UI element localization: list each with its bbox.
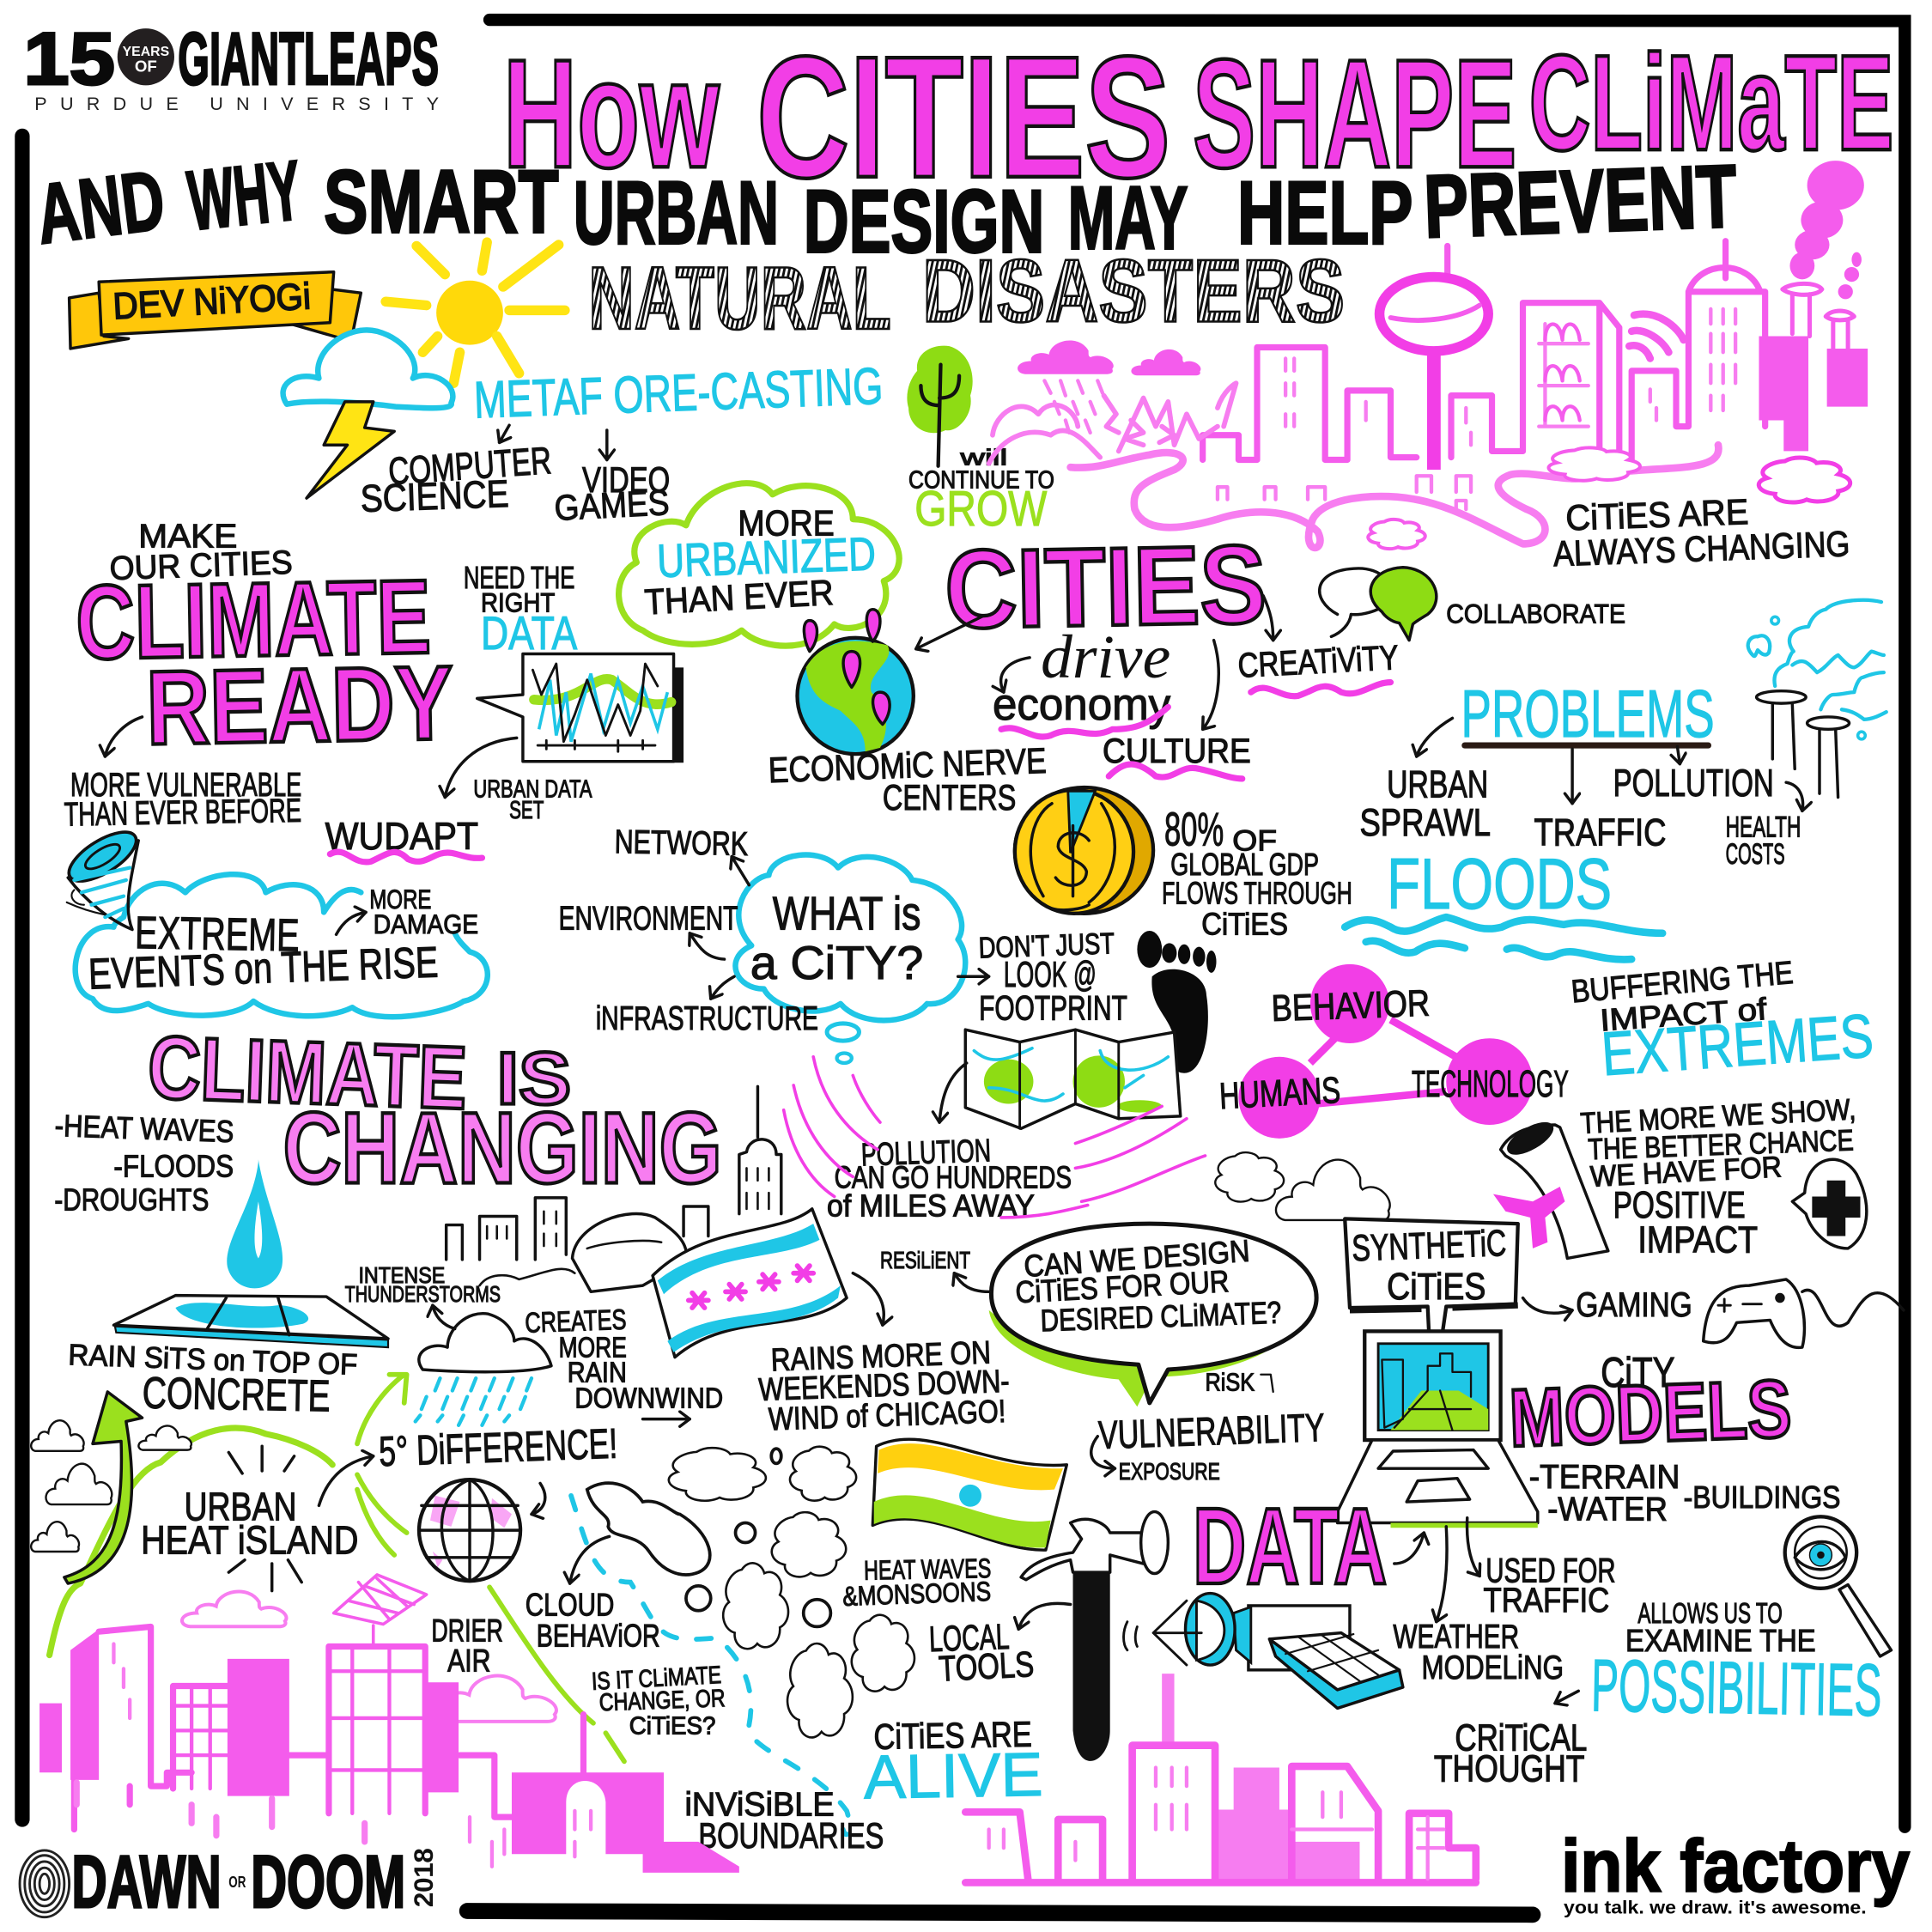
section: problems: COSTS — [1726, 838, 1785, 871]
text: heat waves and monsoons: &MONSOONS — [842, 1576, 992, 1612]
text: 5 degree difference: 5° DiFFERENCE! — [378, 1421, 618, 1475]
subtitle: SMART — [324, 152, 559, 252]
text: drier air — [431, 1613, 503, 1678]
text: critical thought: THOUGHT — [1434, 1748, 1584, 1789]
icon: tornado — [62, 823, 143, 930]
logo: dawn or doom: DOOM — [251, 1841, 405, 1923]
subtitle: URBAN — [574, 163, 779, 263]
text: urban data set with arrow — [445, 738, 592, 824]
text: cities are always changing — [1552, 491, 1850, 574]
illustration: bottom left skyline — [39, 1575, 739, 1873]
list: terrain, water, buildings — [1529, 1459, 1840, 1528]
text: rain sits on top of concrete: RAIN SiTS on TOP OF — [68, 1339, 358, 1382]
callout: extreme events: EXTREME — [135, 908, 300, 961]
logo: 150 years of giant leaps: PURDUE UNIVERSITY — [34, 93, 439, 114]
illustration: top right skyline — [989, 161, 1868, 549]
icon: globe with pins — [798, 610, 914, 754]
logo: 150 years of giant leaps: OF — [135, 57, 157, 75]
text: rains more on weekends: RAINS MORE ON — [770, 1334, 992, 1377]
logo: dawn or doom: DAWN — [71, 1841, 222, 1923]
text: is it climate change or cities: CHANGE, OR — [598, 1685, 726, 1716]
icon: wire globe — [419, 1479, 545, 1581]
icon: sun — [386, 242, 565, 383]
heading: climate is changing: IS — [497, 1038, 571, 1121]
icon: magnifying glass with eye — [1785, 1516, 1891, 1656]
text: computer science and video games — [360, 425, 671, 528]
banner: Dev Niyogi: DEV NiYOGi — [112, 276, 312, 327]
section: floods — [1345, 843, 1662, 959]
text: 80% of global gdp: CiTiES — [1201, 906, 1288, 941]
logo: dawn or doom: 2018 — [408, 1848, 439, 1907]
text: don't just look at footprint: DON'T JUST — [978, 927, 1115, 965]
text and icon: gaming controller — [1523, 1279, 1904, 1347]
callout: extreme events — [76, 874, 488, 1017]
icon: hammer — [1021, 1512, 1168, 1761]
subtitle — [32, 143, 1739, 271]
text: urban heat island: URBAN — [184, 1485, 296, 1529]
heading: data: DATA — [1193, 1485, 1387, 1607]
text: creativity: CREATiViTY — [1237, 638, 1400, 685]
icon: green upward arrow — [50, 1392, 332, 1656]
text: heat waves and monsoons — [842, 1552, 992, 1612]
callout: what is a city: WHAT is — [773, 887, 920, 940]
text: 80% of global gdp: 80% — [1164, 803, 1224, 856]
text: buffering the impact of extremes: BUFFERING THE — [1570, 954, 1795, 1009]
icon: gold coin pie — [1015, 787, 1153, 914]
text: used for traffic, weather modeling: MODELiNG — [1421, 1649, 1564, 1686]
text: cities drive economy, culture — [993, 623, 1251, 779]
icon: water drop — [227, 1159, 283, 1288]
section: problems: TRAFFIC — [1534, 812, 1666, 854]
callout: extreme events: EVENTS on THE RISE — [88, 937, 439, 999]
subtitle: natural disasters: DISASTERS — [922, 240, 1345, 340]
green heat lines — [357, 1375, 624, 1761]
text: the more we show: THE MORE WE SHOW, — [1580, 1093, 1856, 1140]
section: problems: SPRAWL — [1359, 802, 1491, 844]
text: intense thunderstorms — [345, 1264, 501, 1307]
callout: more urbanized than ever — [619, 483, 899, 646]
text: intense thunderstorms: THUNDERSTORMS — [345, 1283, 501, 1307]
text: don't just look at footprint: LOOK @ — [1004, 954, 1097, 994]
text: is it climate change or cities: CiTiES? — [629, 1713, 715, 1741]
text: invisible boundaries — [685, 1787, 884, 1856]
text: creates more rain downwind: DOWNWIND — [574, 1383, 723, 1415]
text: creates more rain downwind: MORE — [559, 1333, 627, 1364]
text: will continue to grow — [908, 446, 1054, 537]
list: heat waves, floods, droughts — [54, 1108, 234, 1217]
text: will continue to grow: CONTINUE TO — [908, 467, 1054, 495]
text: creates more rain downwind — [525, 1304, 723, 1419]
text: computer science and video games: VIDEO — [582, 459, 670, 500]
logo: ink factory: you talk. we draw. it's awesome. — [1564, 1896, 1867, 1917]
text: critical thought — [1434, 1691, 1587, 1789]
heading: climate is changing: CLIMATE — [147, 1017, 469, 1127]
logo: 150 years of giant leaps: YEARS — [123, 45, 169, 59]
text: rain sits on top of concrete — [68, 1339, 358, 1420]
text: 80% of global gdp: FLOWS THROUGH — [1162, 875, 1352, 910]
section: problems: PROBLEMS — [1461, 677, 1715, 751]
text: risk, vulnerability, exposure: EXPOSURE — [1119, 1458, 1220, 1485]
text: economic nerve centers: ECONOMiC NERVE — [768, 740, 1047, 790]
text: 80% of global gdp: GLOBAL GDP — [1170, 847, 1319, 882]
text: rains more on weekends: WIND of CHICAGO! — [768, 1393, 1006, 1437]
text: allows us to examine the possibilities: EXAMINE THE — [1625, 1623, 1816, 1658]
title: How — [503, 27, 720, 200]
logo: 150 years of giant leaps: GIANTLEAPS — [178, 18, 439, 100]
text: urban heat island — [141, 1446, 374, 1591]
subtitle: DESIGN — [804, 172, 1044, 271]
list: terrain, water, buildings: -TERRAIN — [1529, 1459, 1680, 1496]
text: critical thought: CRiTiCAL — [1455, 1717, 1587, 1759]
box: synthetic cities — [1345, 1218, 1518, 1333]
text: allows us to examine the possibilities: ALLOWS US TO — [1637, 1598, 1783, 1630]
text: 80% of global gdp — [1162, 803, 1352, 941]
icon: speech bubbles collaborate: COLLABORATE — [1446, 598, 1625, 629]
text: need the right data — [464, 560, 578, 659]
text: used for traffic, weather modeling: WEATHER — [1393, 1619, 1519, 1656]
text: used for traffic, weather modeling: TRAFFIC — [1483, 1581, 1609, 1619]
subtitle: WHY — [184, 143, 306, 248]
text: cloud behavior: CLOUD — [526, 1586, 614, 1622]
logo: 150 years of giant leaps: 15 — [23, 18, 115, 100]
heading: metaforecasting: METAF ORE-CASTING — [473, 356, 884, 429]
text: cities are alive: ALIVE — [863, 1741, 1043, 1813]
network: behavior, humans, technology: BEHAVIOR — [1271, 983, 1431, 1030]
text: pollution can go hundreds: of MILES AWAY — [827, 1188, 1035, 1224]
text: more vulnerable than ever before: THAN EVER BEFORE — [64, 793, 301, 834]
heading: climate is changing: CHANGING — [283, 1092, 722, 1206]
icon: smokestacks with cyan smoke — [1748, 600, 1886, 798]
heading: cities: CITIES — [944, 523, 1267, 652]
logo: ink factory: ink factory — [1561, 1825, 1910, 1907]
text: urban data set with arrow: URBAN DATA — [473, 776, 592, 804]
text: will continue to grow: will — [959, 446, 1007, 470]
callout: extreme events: MORE — [369, 884, 431, 914]
text: cities are alive: CiTiES ARE — [873, 1714, 1032, 1757]
text: network, environment, infrastructure: ENVIRONMENT — [559, 901, 738, 938]
text: resilient: RESiLiENT — [880, 1247, 970, 1273]
icon: concrete slab with water — [113, 1296, 388, 1347]
text: cities drive economy, culture: CULTURE — [1103, 732, 1251, 770]
text: the more we show: IMPACT — [1637, 1219, 1758, 1261]
text: the more we show: POSITIVE — [1613, 1185, 1746, 1226]
text: buffering the impact of extremes: IMPACT of — [1599, 991, 1769, 1038]
text: economic nerve centers — [768, 740, 1047, 817]
logo: 150 years of giant leaps — [23, 18, 439, 114]
icon: cloud and lightning — [283, 330, 453, 498]
icon: map — [939, 1030, 1181, 1128]
text: economic nerve centers: CENTERS — [883, 777, 1016, 817]
text: more vulnerable than ever before: MORE VULNERABLE — [70, 767, 301, 804]
text: cities drive economy, culture: drive — [1041, 623, 1170, 691]
heading: city models: CiTY — [1601, 1350, 1675, 1396]
text: rains more on weekends — [758, 1334, 1010, 1437]
text: the more we show: WE HAVE FOR — [1589, 1151, 1783, 1194]
icon: footprint — [1137, 931, 1217, 1073]
callout: what is a city: a CiTY? — [750, 936, 923, 989]
text: used for traffic, weather modeling — [1393, 1518, 1615, 1686]
heading: climate is changing — [147, 1017, 722, 1206]
section: problems — [1359, 677, 1803, 871]
network: behavior, humans, technology: TECHNOLOGY — [1412, 1064, 1569, 1105]
text: is it climate change or cities — [591, 1662, 726, 1741]
text: WUDAPT: WUDAPT — [325, 816, 478, 858]
icon: plus speech bubble — [1792, 1159, 1867, 1249]
text: need the right data: NEED THE — [464, 560, 574, 595]
callout: more urbanized than ever: THAN EVER — [643, 572, 835, 622]
text: creativity — [1237, 596, 1400, 696]
text: creates more rain downwind: RAIN — [568, 1357, 627, 1388]
logo: dawn or doom: OR — [228, 1873, 246, 1891]
text: rain sits on top of concrete: CONCRETE — [142, 1368, 331, 1420]
text: risk, vulnerability, exposure — [1091, 1369, 1325, 1485]
text: local tools: LOCAL — [928, 1616, 1010, 1659]
box: synthetic cities: SYNTHETiC — [1352, 1223, 1507, 1269]
text: don't just look at footprint: FOOTPRINT — [979, 989, 1127, 1028]
subtitle: HELP — [1237, 163, 1413, 263]
text: pollution can go hundreds: CAN GO HUNDREDS — [835, 1159, 1072, 1194]
text: network, environment, infrastructure: NETWORK — [614, 823, 749, 863]
text: need the right data: RIGHT — [481, 587, 555, 618]
text: computer science and video games: SCIENCE — [360, 473, 509, 520]
subtitle: natural disasters: NATURAL — [588, 248, 891, 348]
text: invisible boundaries: iNViSiBLE — [685, 1787, 835, 1824]
heading: make our cities climate ready — [75, 519, 454, 767]
chart: urban data line chart — [477, 654, 683, 762]
callout: more urbanized than ever: MORE — [738, 502, 835, 543]
subtitle: natural disasters — [588, 240, 1345, 348]
text and icon: gaming controller: GAMING — [1576, 1285, 1692, 1324]
callout: can we design cities: CAN WE DESIGN — [1023, 1233, 1251, 1284]
heading: city models: MODELS — [1508, 1364, 1793, 1464]
dashed boundary — [571, 1496, 849, 1834]
text: pollution can go hundreds — [827, 1132, 1072, 1224]
text: don't just look at footprint — [958, 927, 1127, 1028]
text: rains more on weekends: WEEKENDS DOWN- — [758, 1363, 1010, 1407]
callout: extreme events: DAMAGE — [374, 908, 478, 939]
text: the more we show — [1580, 1093, 1856, 1261]
text: allows us to examine the possibilities — [1590, 1598, 1882, 1732]
icon: chicago flag — [653, 1209, 884, 1358]
text: cities are always changing: ALWAYS CHANGING — [1552, 523, 1850, 574]
text: more vulnerable than ever before — [64, 717, 301, 834]
text: cloud behavior: BEHAViOR — [537, 1617, 660, 1653]
text: local tools: TOOLS — [938, 1643, 1035, 1689]
section: floods: FLOODS — [1387, 843, 1612, 924]
icon: speech bubbles collaborate — [1320, 568, 1625, 641]
text: heat waves and monsoons: HEAT WAVES — [864, 1552, 992, 1586]
text: drier air: DRIER — [431, 1613, 503, 1649]
list: terrain, water, buildings: -BUILDINGS — [1684, 1479, 1840, 1515]
text: 80% of global gdp: OF — [1232, 824, 1277, 857]
text: used for traffic, weather modeling: USED FOR — [1485, 1552, 1615, 1590]
icon: satellite — [1124, 1594, 1403, 1708]
text: urban data set with arrow: SET — [509, 797, 544, 824]
text: cloud behavior — [526, 1586, 660, 1653]
section: problems: POLLUTION — [1613, 762, 1774, 805]
icon: india flag — [872, 1439, 1066, 1550]
network: behavior, humans, technology — [1218, 964, 1569, 1139]
text: is it climate change or cities: IS IT CLiMATE — [591, 1662, 722, 1696]
text: creates more rain downwind: CREATES — [525, 1304, 627, 1340]
list: terrain, water, buildings: -WATER — [1547, 1492, 1668, 1528]
callout: can we design cities: CiTiES FOR OUR — [1015, 1263, 1230, 1309]
text: network, environment, infrastructure — [559, 823, 818, 1037]
text: computer science and video games: COMPUTER — [387, 440, 553, 493]
callout: what is a city — [735, 855, 965, 1063]
subtitle: AND — [32, 152, 169, 261]
text: drier air: AIR — [447, 1642, 490, 1678]
text: cities are always changing: CiTiES ARE — [1565, 491, 1749, 538]
subtitle: PREVENT — [1423, 146, 1739, 256]
arrow: cloud behavior — [570, 1536, 610, 1583]
title — [503, 21, 1893, 214]
heading: make our cities climate ready: CLIMATE — [75, 557, 432, 681]
text: cities drive economy, culture: economy — [993, 679, 1170, 729]
icon: laptop with city — [1338, 1331, 1538, 1528]
text: risk, vulnerability, exposure: RiSK — [1206, 1369, 1255, 1396]
network: behavior, humans, technology: HUMANS — [1218, 1070, 1341, 1117]
text: the more we show: THE BETTER CHANCE — [1588, 1125, 1854, 1166]
text: risk, vulnerability, exposure: VULNERABILITY — [1097, 1405, 1325, 1457]
heading: make our cities climate ready: READY — [145, 643, 454, 767]
title: SHAPE — [1193, 27, 1516, 200]
clouds near synthetic cities — [1215, 1152, 1390, 1220]
box: synthetic cities: CiTiES — [1387, 1267, 1485, 1308]
heading: make our cities climate ready: OUR CITIES — [109, 544, 293, 587]
callout: can we design cities — [954, 1224, 1316, 1406]
banner: Dev Niyogi — [70, 272, 361, 349]
text: urban heat island: HEAT iSLAND — [141, 1518, 358, 1563]
text: invisible boundaries: BOUNDARIES — [698, 1815, 884, 1856]
text: intense thunderstorms: INTENSE — [358, 1264, 445, 1288]
heading: make our cities climate ready: MAKE — [138, 519, 237, 556]
illustration: bottom right skyline — [965, 1674, 1476, 1882]
text: will continue to grow: GROW — [914, 482, 1048, 537]
icon: green tree — [907, 346, 973, 466]
list: heat waves, floods, droughts: -FLOODS — [113, 1148, 234, 1183]
text: need the right data: DATA — [481, 606, 578, 659]
text: pollution can go hundreds: POLLUTION — [860, 1132, 992, 1172]
text: computer science and video games: GAMES — [553, 482, 671, 528]
logo: dawn or doom — [20, 1841, 439, 1923]
black puffy clouds, center — [587, 1447, 914, 1737]
title: CITIES — [756, 21, 1170, 214]
list: heat waves, floods, droughts: -HEAT WAVES — [54, 1108, 234, 1149]
clouds at left edge — [31, 1420, 191, 1552]
icon: scroll with pink ribbon — [1493, 1117, 1608, 1258]
callout: more urbanized than ever: URBANIZED — [656, 526, 877, 587]
subtitle: MAY — [1068, 167, 1188, 267]
icon: storm cloud with rain — [416, 1305, 551, 1425]
text: local tools — [928, 1603, 1071, 1689]
section: problems: URBAN — [1387, 764, 1488, 806]
text: network, environment, infrastructure: iNFRASTRUCTURE — [596, 1000, 818, 1037]
decoration: pollution arcs — [784, 1057, 1206, 1218]
illustration: chicago skyline — [447, 1086, 781, 1291]
section: problems: HEALTH — [1726, 811, 1801, 844]
text: buffering the impact of extremes — [1570, 954, 1875, 1089]
list: heat waves, floods, droughts: -DROUGHTS — [54, 1182, 209, 1217]
callout: can we design cities: DESIRED CLiMATE? — [1040, 1295, 1282, 1338]
